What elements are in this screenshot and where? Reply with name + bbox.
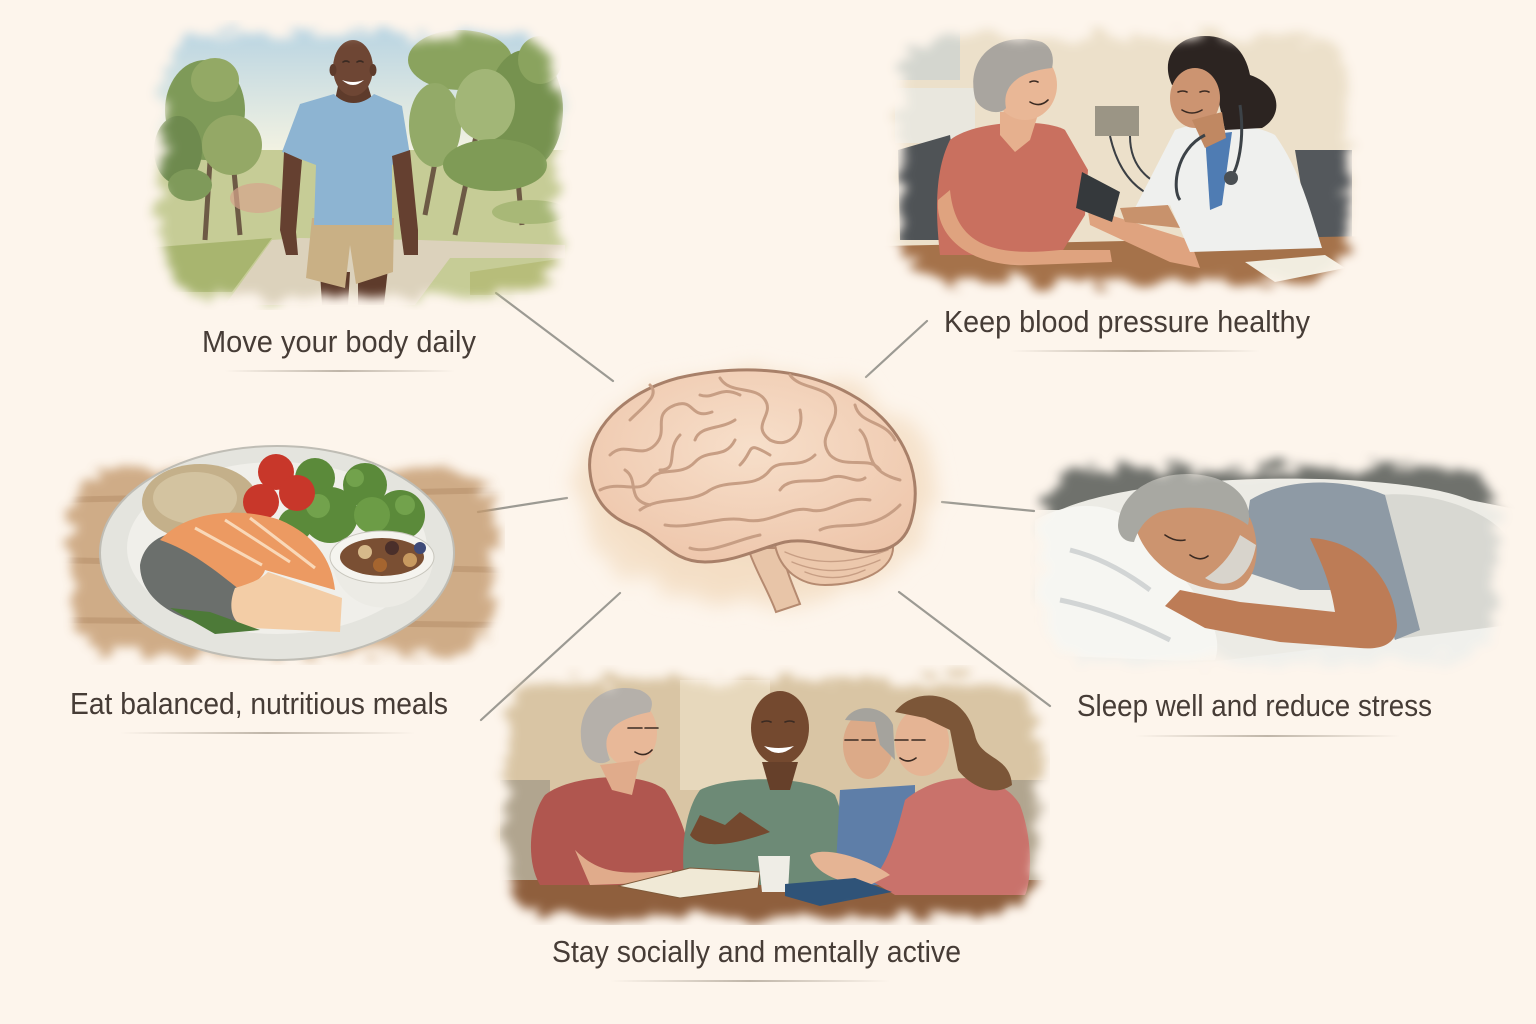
woman right [810, 695, 1030, 895]
head [1138, 508, 1257, 590]
park path [225, 238, 565, 305]
wood backdrop [55, 450, 505, 665]
woman left [531, 688, 692, 885]
table [880, 236, 1370, 300]
blanket [1384, 494, 1500, 640]
pillow [1035, 506, 1217, 665]
rice [142, 464, 258, 540]
label: sleep and stress: Sleep well and reduce stress [1077, 688, 1432, 723]
trees [154, 30, 568, 240]
nut bowl [331, 555, 434, 608]
cerebellum [775, 533, 893, 585]
illustration: friends talking at a table [490, 665, 1050, 925]
plate [100, 446, 454, 660]
patient [937, 39, 1200, 268]
illustration: brain [573, 368, 937, 612]
arm [1165, 538, 1397, 648]
older man [835, 708, 915, 885]
cerebrum [590, 370, 915, 562]
connector lines [478, 293, 1050, 720]
man middle [683, 691, 844, 885]
blue book [785, 878, 892, 906]
illustration: man sleeping [1030, 450, 1520, 675]
shirt [1240, 482, 1420, 640]
gyri folds [600, 375, 900, 550]
label: move your body: Move your body daily [202, 324, 476, 359]
label: blood pressure: Keep blood pressure healthy [944, 304, 1310, 339]
halo [573, 368, 937, 608]
mug [758, 856, 790, 892]
label: balanced meals: Eat balanced, nutritious meals [70, 686, 448, 721]
illustration: man walking in a park [140, 20, 580, 310]
chairs [898, 135, 951, 240]
brain stem [748, 548, 800, 612]
illustration: blood pressure check [880, 20, 1370, 300]
salmon [140, 530, 250, 628]
doctor [1120, 36, 1322, 252]
broccoli [278, 458, 425, 543]
tomatoes [243, 454, 315, 520]
open book [618, 868, 760, 898]
label: social and mental activity: Stay socially and mentally active [552, 934, 961, 969]
illustration: plate of food [55, 446, 505, 665]
table [490, 880, 1050, 925]
man [280, 40, 418, 305]
